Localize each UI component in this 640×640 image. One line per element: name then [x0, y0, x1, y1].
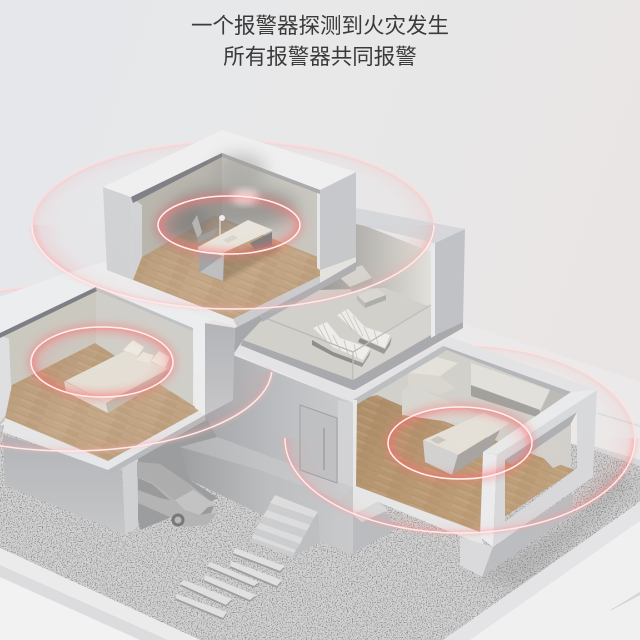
base plate — [0, 323, 640, 640]
office back walls — [131, 153, 222, 262]
front signal ring: kitchen outer — [282, 438, 638, 537]
ground shadow — [470, 470, 640, 590]
lower plinth wall — [180, 437, 355, 554]
lounge chair front — [312, 322, 371, 367]
kitchen room — [353, 337, 597, 577]
left kerb — [0, 548, 200, 640]
glass railing — [260, 305, 431, 380]
kitchen front-right column — [460, 493, 573, 577]
house — [0, 130, 597, 620]
car — [137, 462, 217, 527]
kitchen front-left column — [353, 502, 397, 554]
kitchen island — [423, 413, 510, 475]
office roof — [103, 130, 356, 197]
office room — [103, 130, 356, 327]
terrace right wall — [431, 243, 436, 338]
entrance door — [300, 405, 337, 483]
stepping stones — [175, 548, 285, 620]
terrace roof — [348, 208, 465, 243]
kitchen cabinets — [402, 357, 568, 468]
bedroom wood floor — [5, 343, 200, 461]
kitchen roof band — [353, 337, 597, 400]
inner signal ring: kitchen — [388, 407, 532, 479]
title line 1: 一个报警器探测到火灾发生 — [191, 14, 449, 38]
garage back wall — [125, 415, 218, 530]
door side strip — [338, 400, 353, 487]
central column — [233, 315, 262, 400]
bedroom slab — [3, 410, 205, 470]
office slab — [125, 280, 237, 327]
smoke — [160, 154, 297, 244]
desk shadow — [200, 240, 280, 281]
left garage column — [3, 435, 138, 535]
entrance stairs — [252, 495, 320, 557]
bedroom room — [0, 290, 206, 476]
terrace slab — [240, 322, 463, 390]
inner signal ring: office — [158, 196, 300, 254]
bedroom roof — [0, 262, 213, 338]
terrace — [235, 208, 465, 403]
front signal ring: office outer — [30, 225, 436, 312]
desk and chair — [192, 215, 273, 281]
lounge chair back — [337, 309, 392, 354]
bedroom side wall — [193, 323, 205, 415]
front signal ring: bedroom outer — [0, 372, 274, 454]
kitchen wood floor — [353, 395, 575, 533]
inner signal ring: bedroom — [31, 327, 173, 397]
bed — [64, 340, 170, 413]
office wood floor — [133, 215, 320, 319]
kitchen left wall edge — [353, 400, 357, 487]
kitchen window frame — [480, 390, 597, 547]
terrace stairs — [337, 265, 386, 308]
title line 2: 所有报警器共同报警 — [223, 45, 417, 69]
right kerb — [443, 502, 640, 640]
front ledge — [235, 345, 358, 403]
kitchen lower slab — [353, 485, 484, 546]
gravel ground — [0, 395, 640, 640]
back half of signal rings — [0, 141, 635, 533]
upper front wall — [205, 355, 353, 487]
office outer left wall — [103, 187, 133, 280]
